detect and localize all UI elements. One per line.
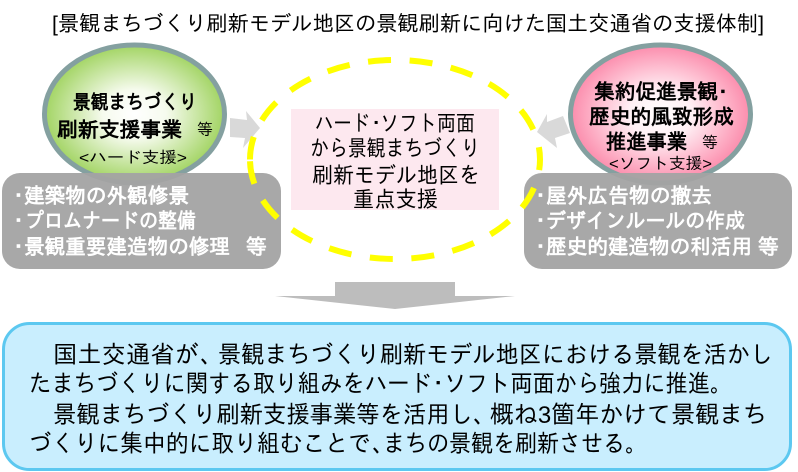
panel: hard support examples: プロムナードの整備 bbox=[25, 209, 196, 233]
panel: hard support examples: 等 bbox=[246, 236, 267, 259]
panel: conclusion: づくりに集中的に取り組むことで bbox=[29, 431, 371, 458]
panel: conclusion: 景観まちづくり刷新モデル地区における景観を活かし bbox=[218, 342, 773, 369]
panel: central message: から景観まちづくり bbox=[310, 136, 480, 161]
panel: soft support examples: 等 bbox=[758, 236, 779, 259]
panel: soft support examples: ・ bbox=[530, 236, 551, 259]
panel: conclusion: まちの景観を刷新させる。 bbox=[383, 431, 647, 458]
ellipse: soft support: <ソフト支援> bbox=[609, 155, 712, 173]
panel: hard support examples: ・ bbox=[8, 185, 29, 208]
panel: soft support examples: 歴史的建造物の利活用 bbox=[546, 235, 752, 259]
panel: soft support examples: 屋外広告物の撤去 bbox=[546, 184, 712, 208]
panel: conclusion: たまちづくりに関する取り組みをハード bbox=[29, 371, 432, 398]
arrow: right to centre bbox=[537, 114, 570, 148]
title: [景観まちづくり刷新モデル地区の景観刷新に向けた国土交通省の支援体制] bbox=[52, 12, 764, 36]
panel: soft support examples: ・ bbox=[530, 210, 551, 233]
panel: conclusion: ・ bbox=[426, 371, 450, 398]
panel: conclusion: 、 bbox=[473, 402, 498, 429]
panel: central message bbox=[291, 109, 499, 212]
ellipse: hard support bbox=[44, 45, 224, 183]
arrow: left to centre bbox=[230, 111, 260, 148]
panel: soft support examples: デザインルールの作成 bbox=[546, 209, 745, 233]
panel: conclusion: 景観まちづくり刷新支援事業等を活用し bbox=[53, 402, 473, 429]
panel: central message: 重点支援 bbox=[353, 187, 438, 212]
ellipse: soft support: 等 bbox=[702, 134, 718, 152]
panel: central message: ・ bbox=[365, 111, 388, 136]
panel: central message: 刷新モデル地区を bbox=[312, 163, 480, 188]
panel: hard support examples: 建築物の外観修景 bbox=[24, 184, 189, 208]
ellipse: soft support: 推進事業 bbox=[606, 130, 687, 154]
panel: hard support examples bbox=[2, 173, 281, 269]
panel: central message: ソフト両面 bbox=[380, 111, 475, 136]
ellipse: hard support: 等 bbox=[197, 121, 213, 139]
arrow: down bbox=[275, 282, 515, 309]
panel: conclusion: 国土交通省が bbox=[53, 342, 199, 369]
panel: hard support examples: 景観重要建造物の修理 bbox=[24, 235, 230, 259]
panel: conclusion: 概ね3箇年かけて景観まち bbox=[490, 402, 767, 429]
panel: soft support examples bbox=[524, 173, 792, 269]
panel: soft support examples: ・ bbox=[530, 185, 551, 208]
panel: conclusion: 、 bbox=[200, 342, 224, 369]
panel: hard support examples: ・ bbox=[8, 236, 29, 259]
ellipse: soft support bbox=[570, 45, 750, 183]
panel: hard support examples: ・ bbox=[8, 210, 29, 233]
ellipse: hard support: 景観まちづくり bbox=[73, 91, 197, 114]
ellipse: hard support: 刷新支援事業 bbox=[57, 118, 182, 142]
ellipse: soft support: ・ bbox=[713, 82, 733, 104]
panel: central message: ハード bbox=[315, 111, 370, 136]
dashed yellow ellipse bbox=[250, 60, 540, 259]
panel: conclusion bbox=[4, 324, 790, 470]
panel: conclusion: 、 bbox=[372, 431, 396, 458]
ellipse: soft support: 歴史的風致形成 bbox=[589, 105, 734, 129]
ellipse: hard support: <ハード支援> bbox=[79, 149, 187, 167]
ellipse: soft support: 集約促進景観 bbox=[594, 81, 718, 104]
panel: conclusion: ソフト両面から強力に推進。 bbox=[444, 371, 732, 398]
